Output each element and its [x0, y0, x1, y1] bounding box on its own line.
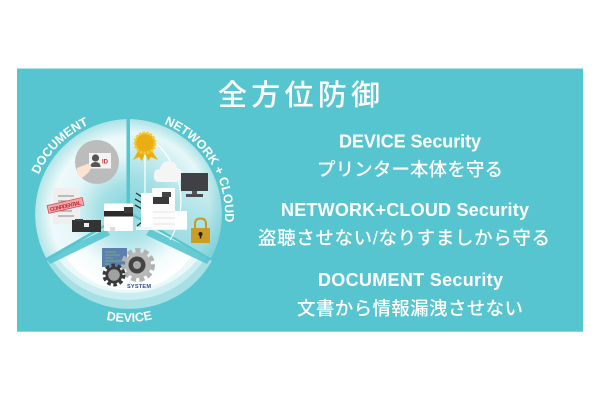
icon: large office printer	[135, 188, 187, 230]
segment: network and cloud	[130, 119, 222, 258]
icon: monitor	[181, 173, 208, 197]
icon: confidential document	[47, 188, 84, 224]
icon: padlock	[191, 218, 210, 243]
heading: NETWORK+CLOUD Security: NETWORK+CLOUD Security	[281, 200, 529, 220]
icon: cloud	[154, 161, 183, 182]
label: DEVICE: DEVICE	[107, 310, 152, 322]
security pie diagram	[31, 116, 234, 322]
icon: network connection arc	[145, 143, 181, 240]
text: document description: 文書から情報漏洩させない	[297, 298, 523, 319]
teal banner background	[17, 68, 583, 332]
text: device description: プリンター本体を守る	[317, 159, 503, 180]
icon: system gears: SYSTEM	[127, 284, 151, 290]
heading: DOCUMENT Security: DOCUMENT Security	[318, 270, 503, 290]
icon: system gears	[102, 248, 152, 290]
icon: dark scanner	[72, 219, 101, 232]
icon: certificate badge	[133, 133, 158, 161]
icon: small printer	[104, 204, 133, 231]
icon: confidential document: CONFIDENTIAL	[50, 200, 83, 213]
text: network description: 盗聴させない/なりすましから守る	[258, 228, 550, 248]
icon: ID authentication: ID	[102, 160, 109, 166]
shading: network lower right	[130, 119, 222, 258]
title: 全方位防御	[218, 79, 380, 112]
label: NETWORK + CLOUD: NETWORK + CLOUD	[164, 116, 234, 222]
heading: DEVICE Security: DEVICE Security	[339, 132, 481, 152]
divider lines	[46, 229, 211, 264]
segment: device	[47, 216, 212, 309]
icon: ID authentication	[75, 140, 119, 184]
label: DOCUMENT: DOCUMENT	[31, 117, 86, 174]
segment: document	[35, 119, 126, 258]
